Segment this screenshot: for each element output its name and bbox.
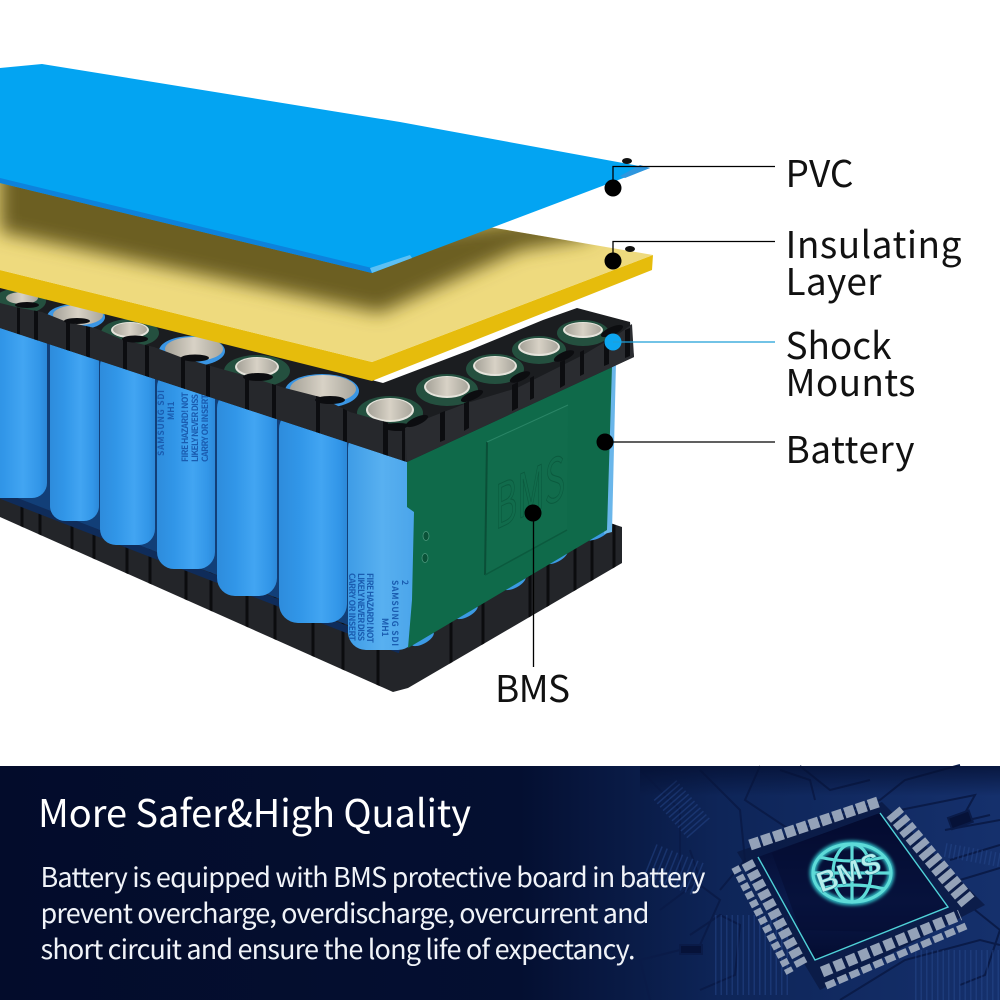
callout: battery: Battery xyxy=(786,420,914,474)
battery pack xyxy=(0,283,634,700)
panel body text: Battery is equipped with BMS protective board in battery xyxy=(40,856,706,895)
blue cell bottoms behind the board xyxy=(408,520,613,649)
cell print on middle cell: LIKELY NEVER DISS xyxy=(189,394,201,462)
cell print on middle cell xyxy=(155,390,211,462)
hatched traces xyxy=(650,790,1000,975)
top holder surface with terminals xyxy=(0,283,634,462)
cell print on corner cell: 2 xyxy=(399,580,411,585)
bottom panel xyxy=(0,765,1000,1000)
chip body xyxy=(758,813,948,960)
PVC sheet xyxy=(0,64,650,273)
cell print on corner cell: FIRE HAZARD! NOT xyxy=(364,573,376,644)
top holder front face xyxy=(0,300,412,470)
cell print on corner cell: LIKELY NEVER DISS xyxy=(355,573,367,641)
callout: battery xyxy=(596,420,914,474)
front row of blue cylindrical cells xyxy=(0,320,416,650)
callout: insulating layer: Insulating xyxy=(786,215,962,269)
callout: shock mounts xyxy=(604,316,916,407)
shadow behind cells xyxy=(0,325,407,650)
green BMS circuit board xyxy=(407,366,612,648)
BMS chip xyxy=(735,802,985,990)
panel heading: More Safer&High Quality xyxy=(38,783,471,838)
bottom black holder frame xyxy=(0,490,622,700)
callout: shock mounts: Shock xyxy=(786,316,892,370)
callout: BMS: BMS xyxy=(495,659,570,713)
cell print on middle cell: FIRE HAZARD! NOT xyxy=(179,391,191,462)
circuit trace background xyxy=(640,765,1000,1000)
globe icon with BMS: BMS xyxy=(812,847,885,900)
glowing chip edges xyxy=(758,813,948,960)
callout: insulating layer xyxy=(604,215,962,306)
white background xyxy=(0,0,1000,766)
callout: PVC xyxy=(604,144,854,198)
raised BMS cover: BMS xyxy=(495,429,565,548)
callout: PVC: PVC xyxy=(786,144,854,198)
cell print on middle cell: SAMSUNG SDI xyxy=(155,390,167,456)
callout: insulating layer: Layer xyxy=(786,252,882,306)
callout: BMS xyxy=(495,504,570,713)
panel body text: short circuit and ensure the long life of expectancy. xyxy=(40,928,636,967)
cell print on middle cell: MH1 xyxy=(165,401,177,420)
panel body text xyxy=(40,856,706,967)
cell print on corner cell: MH1 xyxy=(379,618,391,637)
cell print on corner cell: CARRY OR INSERT xyxy=(346,573,358,642)
cell print on corner cell: SAMSUNG SDI xyxy=(389,580,401,646)
chip pads xyxy=(735,802,968,986)
callout: shock mounts: Mounts xyxy=(786,353,916,407)
cell print on middle cell: CARRY OR INSERT xyxy=(199,393,211,462)
insulating layer sheet xyxy=(0,183,653,381)
panel body text: prevent overcharge, overdischarge, overcurrent and xyxy=(40,892,650,931)
top holder side face xyxy=(404,322,634,462)
cell sliver at right end xyxy=(604,362,616,534)
cell print on corner cell xyxy=(346,573,411,646)
raised BMS cover xyxy=(485,405,568,575)
terminals, side row xyxy=(357,320,609,430)
terminals, front row xyxy=(0,288,359,408)
